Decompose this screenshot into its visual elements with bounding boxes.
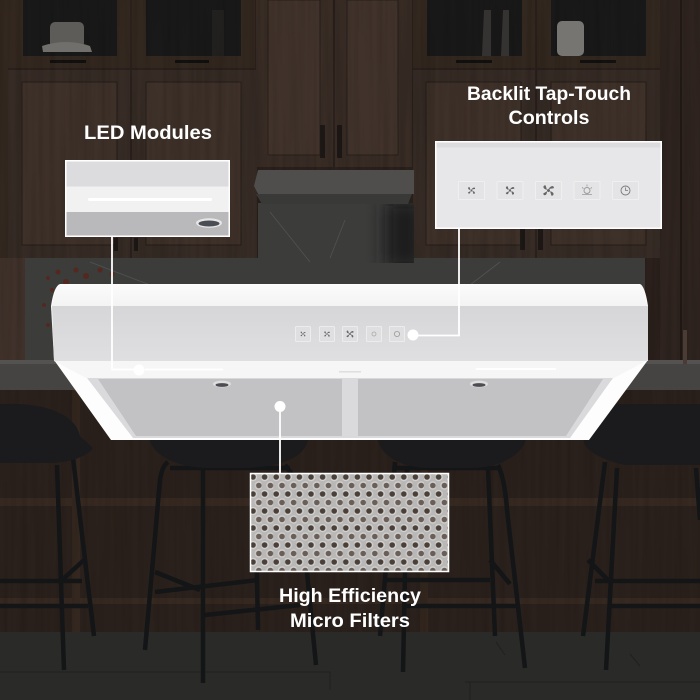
center logo mark [339,371,361,372]
button: timer [390,326,404,342]
button: high fan [342,326,358,342]
heading: High Efficiency Micro Filters [279,585,421,632]
leader line: controls [408,228,459,340]
floor [0,632,700,700]
left filter [98,379,342,436]
leader line: LED modules [112,237,223,376]
hood underside lip [54,361,646,378]
inset: LED module closeup [65,160,230,237]
countertop [0,330,700,390]
heading: Backlit Tap-Touch Controls [467,83,631,129]
right filter [358,379,603,436]
icon: high fan [536,182,562,200]
button: light [366,326,382,342]
inset: mesh filter closeup [250,474,448,572]
icon: low fan [458,182,484,200]
background range hood [254,170,414,204]
stool: center right [378,440,526,672]
stool: center left [145,440,316,683]
decorative branch with berries [42,268,114,327]
hood top band [52,285,647,306]
left light [213,381,231,387]
stool: far right [583,404,700,670]
lower wood paneling [0,390,700,632]
callout: LED modules [65,122,230,237]
button: low fan [296,326,310,342]
filter tray frame [87,378,613,438]
inset: control panel closeup [435,141,662,229]
icon: light [574,182,600,200]
heading: High Efficiency Micro Filters: High Efficiency [279,585,421,607]
heading: High Efficiency Micro Filters: Micro Filters [290,610,410,632]
heading: LED Modules: LED Modules [84,122,212,144]
center cabinet [256,0,412,167]
button: medium fan [320,326,334,342]
range hood [51,284,648,440]
backsplash [25,200,645,360]
hood body [51,284,648,440]
icon: timer [612,182,638,200]
right light [470,381,488,387]
lower right cabinets [413,70,660,258]
hood front face [52,306,648,361]
shelf decor [42,10,584,56]
stool: far left [0,404,94,670]
leader line: filters [274,401,286,473]
heading: Backlit Tap-Touch Controls: Controls [508,107,590,129]
callout: backlit controls [435,83,662,229]
right LED strip [476,368,556,370]
callout: micro filters [250,474,448,632]
heading: Backlit Tap-Touch Controls: Backlit Tap-Touch [467,83,631,105]
icon: medium fan [497,182,523,200]
lower left cabinets [8,70,257,258]
hood control panel [296,326,404,342]
upper left cabinets [8,0,255,68]
background: kitchen wall [0,0,700,360]
upper right cabinets [413,0,660,68]
